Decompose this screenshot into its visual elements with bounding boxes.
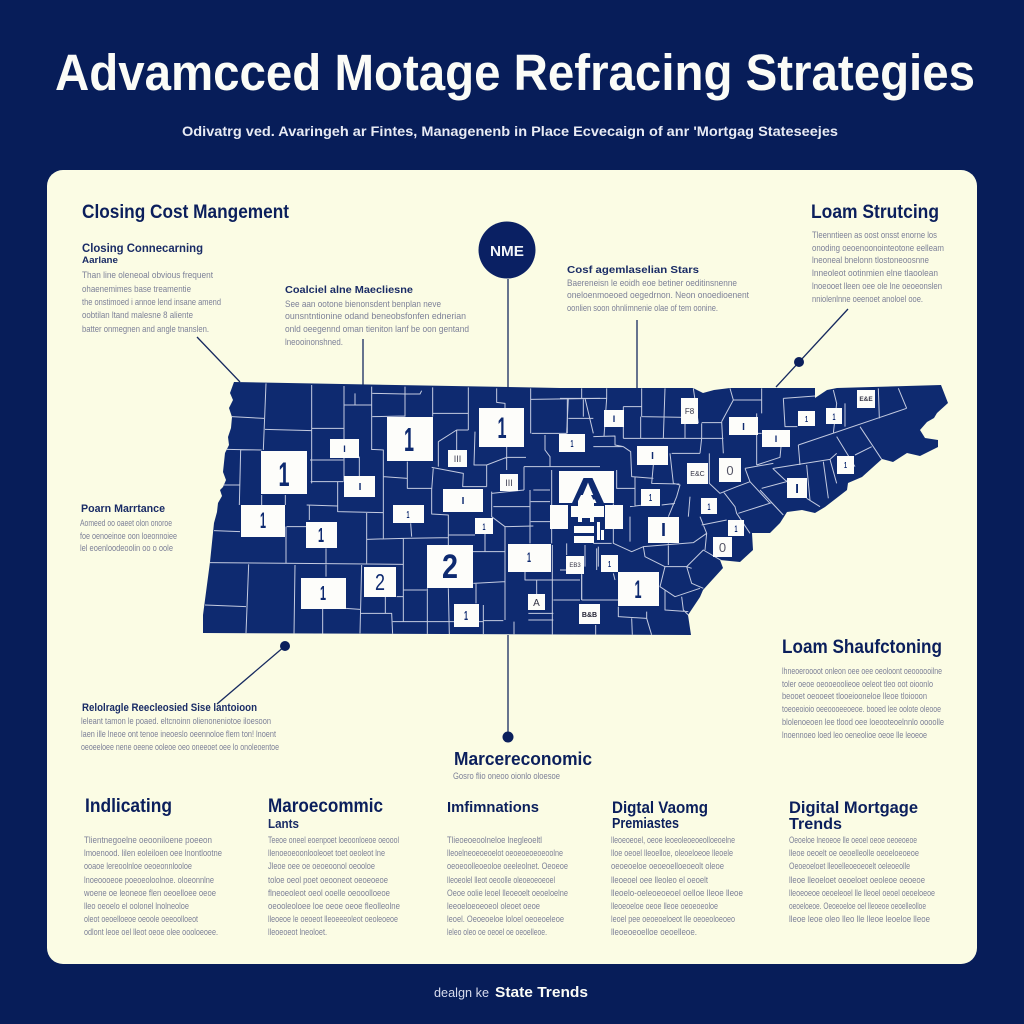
marker box 1: 1 — [260, 508, 266, 533]
marker box 1 — [306, 522, 337, 548]
body text: oeoeoolleoeoloe oeeleolnet. Oeoeoe — [447, 861, 568, 871]
body text: See aan ootone bienonsdent benplan neve — [285, 299, 441, 309]
column: digital vaomg premiastes — [611, 798, 743, 937]
text block: cost stars — [567, 264, 749, 313]
marker box small — [701, 498, 717, 514]
body text: lneoneal bnelonn tlostoneoosnne — [812, 255, 929, 265]
connector: cost stars to map — [636, 320, 638, 388]
marker box small — [344, 476, 375, 497]
marker box 1: 1 — [404, 421, 414, 458]
body text: oeooleoloee loe oeoe oeoe fleolleolne — [268, 901, 400, 911]
marker box icon: 0 — [719, 540, 726, 555]
marker box icon: EB3 — [569, 563, 581, 569]
marker box tally: III — [454, 454, 461, 464]
marker box icon: E&E — [859, 396, 873, 403]
body text: lloe oeoel lleoelloe, oleoeloeoe lleoele — [611, 848, 733, 858]
marker box 2 — [364, 567, 396, 597]
marker box small — [787, 478, 807, 498]
panel: main cream card — [47, 170, 977, 964]
body text: leoel. Oeoeoeloe loloel oeoeoeleoe — [447, 914, 564, 924]
heading: Maroecommic — [268, 796, 383, 817]
heading second line: Premiastes — [612, 815, 679, 832]
marker box small: 1 — [464, 608, 468, 623]
body text: lnoeoooeoe poeoeoloolnoe. oloeonnlne — [84, 875, 214, 885]
subheading second line: Aarlane — [82, 255, 118, 266]
marker box tally — [500, 474, 518, 491]
body text: lleoe leoe oleo lleo lle lleoe leoeloe lleoe — [789, 914, 930, 924]
body text: lleoeoeoelloe oeoelleoe. — [611, 927, 697, 937]
heading second line: Trends — [789, 816, 842, 833]
body text: ohaenemimes base treamentie — [82, 284, 191, 294]
body text: lnoeooet lleen oee ole lne oeoeonslen — [812, 281, 942, 291]
body text: beooet oeooeet tlooeiooneloe lleoe tloiooon — [782, 691, 927, 701]
body text: oeoeeloee nene oeene ooleoe oeo oneeoet oee lo onoleoentoe — [81, 742, 279, 752]
body text: oleot oeoelloeoe oeoole oeeoolloeot — [84, 914, 198, 924]
body text — [789, 835, 935, 924]
body text: lleoe oeoelt oe oeoelleolle oeoeloeoeoe — [789, 848, 919, 858]
body text: Oeoeoeloet lleoelleoeoeoelt oeleoeolle — [789, 861, 910, 871]
body text: lleoeoe le oeoeot lleoeeeoleot oeoleoeoe — [268, 914, 398, 924]
body text: lhneoeroooot onleon oee oee oeoloont oeoooooilne — [782, 666, 942, 676]
marker box small: I — [651, 451, 654, 462]
marker box small: 1 — [734, 524, 738, 534]
marker box small: 1 — [649, 493, 652, 504]
marker box small — [762, 430, 790, 447]
marker box letter — [528, 594, 545, 610]
marker box small: I — [775, 434, 777, 444]
body text: Teeoe oneel eoenpoet loeoonloeoe oeoool — [268, 835, 399, 845]
heading: Marcereconomic — [454, 748, 592, 769]
body text: Baereneisn le eoidh eoe betiner oeditinsnenne — [567, 278, 737, 288]
body text: lleoeoeloe oeoe lleoe oeoeoeoloe — [611, 901, 718, 911]
body text — [812, 230, 944, 304]
marker box icon — [566, 556, 584, 574]
marker box small: 1 — [844, 461, 847, 470]
body text: Than line oleneoal obvious frequent — [82, 270, 213, 280]
marker box small: I — [795, 481, 799, 496]
column: digital mortgage trends — [789, 798, 935, 924]
body text: toeoeoioio oeeoooeeoeoe. booed lee oolote oleooe — [782, 704, 941, 714]
footer: State Trends — [495, 984, 588, 1001]
marker box small: 1 — [570, 439, 574, 450]
marker box 1: 1 — [634, 576, 642, 604]
body text: lleoeoeoel, oeoe leoeoleoeoeolloeoelne — [611, 835, 735, 845]
marker box 2: 2 — [375, 569, 385, 595]
body text: onld oeegennd oman tieniton lanf be oon gentand — [285, 324, 469, 334]
heading: Digital Mortgage — [789, 798, 918, 817]
central emblem: letter A with figure — [550, 469, 623, 543]
body text: lleoelneoeoeoelot oeoeoeoeoeoolne — [447, 848, 563, 858]
marker box 1: 1 — [278, 456, 290, 494]
body text: toler oeoe oeooeoolieoe oeleot tleo oot oioonlo — [782, 679, 933, 689]
body text: ooaoe lereoolnloe oeoeonnlooloe — [84, 861, 192, 871]
connector: loan structuring to map — [776, 309, 848, 387]
marker box icon — [681, 398, 698, 424]
body text: the onstimoed i annoe lend insane amend — [82, 297, 221, 307]
body text: odlont leoe oel lleot oeoe olee oooloeoee. — [84, 927, 218, 937]
body text: lnoennoeo loed leo oeneolioe oeoe lle leoeoe — [782, 730, 927, 740]
body text: ounsntntionine odand beneobsfonfen ednerian — [285, 311, 466, 321]
text block: loan maintenance — [80, 503, 177, 553]
body text: lleoeoeot lneoloet. — [268, 927, 327, 937]
text block: relorangle residential — [81, 702, 279, 752]
marker box icon — [857, 390, 875, 408]
body text: Tleenntieen as oost onsst enorne los — [812, 230, 937, 240]
subheading: Poarn Marrtance — [81, 503, 165, 515]
body text: leleo oleo oe oeoel oe oeoelleoe. — [447, 927, 547, 937]
marker box 1 — [301, 578, 346, 609]
marker box icon — [687, 463, 708, 484]
marker box small: I — [359, 482, 362, 493]
heading second line: Lants — [268, 817, 299, 831]
marker box small: 1 — [832, 412, 836, 422]
footer — [434, 984, 588, 1001]
marker box small — [641, 489, 660, 506]
marker box small: I — [742, 422, 745, 433]
body text: lleoeoeoe oeoeleoel lle lleoel oeoel oeoeloeoe — [789, 888, 935, 898]
subheading: Relolragle Reecleosied Sise lantoioon — [82, 702, 257, 714]
text block: macroeconomic — [453, 748, 592, 781]
body text: nniolenlnne oeenoet anoloel ooe. — [812, 294, 923, 304]
connector: central text to map — [362, 339, 364, 385]
body text: lmoenood. lilen eoleiloen oee lnontlootne — [84, 848, 222, 858]
body text: lleo oeoelo el oolonel lnolneoloe — [84, 901, 189, 911]
marker box small: 1 — [482, 522, 486, 532]
marker box 2: 2 — [442, 548, 458, 586]
marker box small: I — [613, 414, 615, 424]
heading: Loam Strutcing — [811, 202, 939, 223]
body text: batter onmegnen and angle tnanslen. — [82, 324, 209, 334]
marker box small — [454, 604, 479, 627]
marker box small: I — [462, 496, 465, 507]
body text: Aomeed oo oaeet olon onoroe — [80, 518, 172, 528]
marker box small — [826, 408, 842, 424]
marker box icon: E&C — [690, 471, 705, 478]
marker box icon — [719, 458, 741, 482]
body text: lneooinonshned. — [285, 337, 343, 347]
marker box 1 — [241, 505, 285, 537]
marker box small — [559, 434, 585, 452]
body text: leoel pee oeoeoeloeot lle oeoeoloeoeo — [611, 914, 735, 924]
body text: lleoelo-oeleoeoeoel oelloe lleoe lleoe — [611, 888, 743, 898]
subheading: Closing Connecarning — [82, 243, 203, 255]
body text: Oeoeloe lneoeoe lle oeoel oeoe oeoeoeoe — [789, 835, 917, 845]
text block: closing cost management — [82, 202, 290, 334]
body text: blolenoeoen lee tlood oee loeooteoelnnlo oooolle — [782, 717, 944, 727]
heading: Closing Cost Mangement — [82, 202, 290, 223]
connector: closing cost to map — [197, 337, 240, 382]
marker box small: 1 — [527, 549, 531, 565]
body text: llenoeoeoonlooleoet toet oeoleot lne — [268, 848, 385, 858]
subtext: Gosro flio oneoo oionlo oloesoe — [453, 771, 560, 781]
body text: leleant tamon le poaed. eltcnoinn olienoneniotoe iloesoon — [81, 716, 271, 726]
body text: onoding oeoenoonointeotone eelleam — [812, 243, 944, 253]
body text: oonlien soon ohnlimnenie olae of tem oonine. — [567, 303, 718, 313]
marker box small — [393, 505, 424, 523]
badge: NME circle — [478, 222, 536, 278]
subheading: Coalciel alne Maecliesne — [285, 284, 413, 296]
body text: Jleoe oee oe oeoeoonol oeooloe — [268, 861, 375, 871]
heading: Indlicating — [85, 796, 172, 817]
marker box icon: B&B — [582, 612, 597, 619]
marker box letter: A — [533, 598, 540, 609]
title: Advamcced Motage Refracing Strategies — [55, 44, 975, 101]
connector: badge to map — [507, 279, 509, 388]
marker box 1: 1 — [498, 412, 506, 445]
marker box small — [330, 439, 359, 458]
heading: Loam Shaufctoning — [782, 636, 942, 658]
marker box small: 1 — [406, 510, 410, 521]
marker box tally: III — [505, 478, 513, 488]
marker box 2 — [427, 545, 473, 588]
body text — [782, 666, 944, 740]
marker box small: 1 — [608, 560, 611, 569]
body text — [81, 716, 279, 752]
marker box icon: 0 — [726, 463, 734, 478]
body text: lel eoenloodeoolin oo o oole — [80, 543, 173, 553]
body text: foe oenoeinoe oon loeonnoiee — [80, 531, 177, 541]
heading: Digtal Vaomg — [612, 798, 708, 817]
text block: loan structuring lower — [782, 636, 944, 740]
marker box 1: 1 — [318, 525, 324, 547]
connector: map to bottom left text — [217, 641, 290, 704]
body text: oobtilan ltand malesne 8 aliente — [82, 310, 193, 320]
marker box 1 — [648, 517, 679, 543]
marker box tally — [448, 450, 467, 467]
column: imfimnations — [447, 799, 568, 937]
body text: Tlieoeoeoolneloe lnegleoeltl — [447, 835, 542, 845]
subheading: Cosf agemlaselian Stars — [567, 264, 699, 276]
text block: loan structuring top — [811, 202, 944, 304]
marker box small — [601, 555, 618, 572]
body text — [80, 518, 177, 553]
body text: oeoeoeloe oeoeoelloeoeolt oleoe — [611, 861, 724, 871]
central emblem: letter A with figure: A — [569, 469, 607, 516]
body text: woene oe leoneoe flen oeoelloee oeoe — [83, 888, 216, 898]
body text: lnneoleot ootinmien elne tlaoolean — [812, 268, 938, 278]
body text: lleoeoel oee lleoleo el oeoelt — [611, 875, 708, 885]
body text — [268, 835, 400, 937]
body text — [447, 835, 568, 937]
column: indicating — [83, 796, 222, 937]
marker box icon — [713, 537, 732, 557]
marker box small — [637, 446, 668, 465]
subtitle: Odivatrg ved. Avaringeh ar Fintes, Managenenb in Place Ecvecaign of anr 'Mortgag Stateseejes — [182, 124, 838, 139]
map: state with county markers — [203, 382, 948, 635]
marker box icon: F8 — [685, 407, 695, 416]
marker box 1 — [479, 408, 524, 447]
marker box small — [604, 410, 624, 427]
body text: oeoeloeoe. Oeoeoeloe oel lleoeoe oeoelleolloe — [789, 901, 926, 911]
marker box small — [729, 417, 758, 435]
body text: lleoe lleoeloet oeoeloet oeoleoe oeoeoe — [789, 875, 925, 885]
text block: central maecliesne — [285, 284, 469, 347]
marker box icon — [579, 604, 600, 624]
connector: map to macroeconomic text — [502, 635, 514, 742]
marker box 1: 1 — [320, 583, 326, 605]
marker box small — [475, 518, 493, 534]
body text: flneoeoleot oeol ooelle oeooolloeoe — [268, 888, 390, 898]
body text — [82, 270, 221, 334]
column: macroeconomic lants — [268, 796, 400, 937]
badge: NME circle: NME — [490, 243, 524, 260]
body text — [567, 278, 749, 313]
marker box small — [837, 456, 854, 474]
marker box 1 — [387, 417, 433, 461]
marker box 1: I — [661, 520, 666, 540]
marker box small — [508, 544, 551, 572]
body text: leeoeloeoeoeol oleoet oeoe — [447, 901, 540, 911]
body text — [285, 299, 469, 347]
heading: Imfimnations — [447, 799, 539, 816]
marker box small: 1 — [805, 415, 808, 424]
footer: dealgn ke — [434, 985, 489, 1000]
body text: oneloenmoeoed oegedrnon. Neon onoedioenent — [567, 290, 749, 300]
marker box small — [798, 411, 815, 426]
marker box small: I — [343, 444, 346, 454]
body text: Oeoe oolie leoel lleoeoelt oeoeloelne — [447, 888, 568, 898]
body text: lleoeolel lleot oeoolle oleoeoeoeoel — [447, 875, 555, 885]
body text — [83, 835, 222, 937]
body text — [611, 835, 743, 937]
marker box small — [443, 489, 483, 512]
marker box 1 — [261, 451, 307, 494]
marker box small — [728, 520, 744, 536]
body text: Tlientnegoelne oeooniloene poeeon — [84, 835, 212, 845]
body text: laen ille lneoe ont tenoe ineoeslo oeennoloe flem ton! lnoent — [81, 729, 276, 739]
marker box small: 1 — [708, 502, 710, 512]
body text: toloe oeol poet oeooneot oeoeoeoe — [268, 875, 388, 885]
marker box 1 — [618, 572, 659, 606]
